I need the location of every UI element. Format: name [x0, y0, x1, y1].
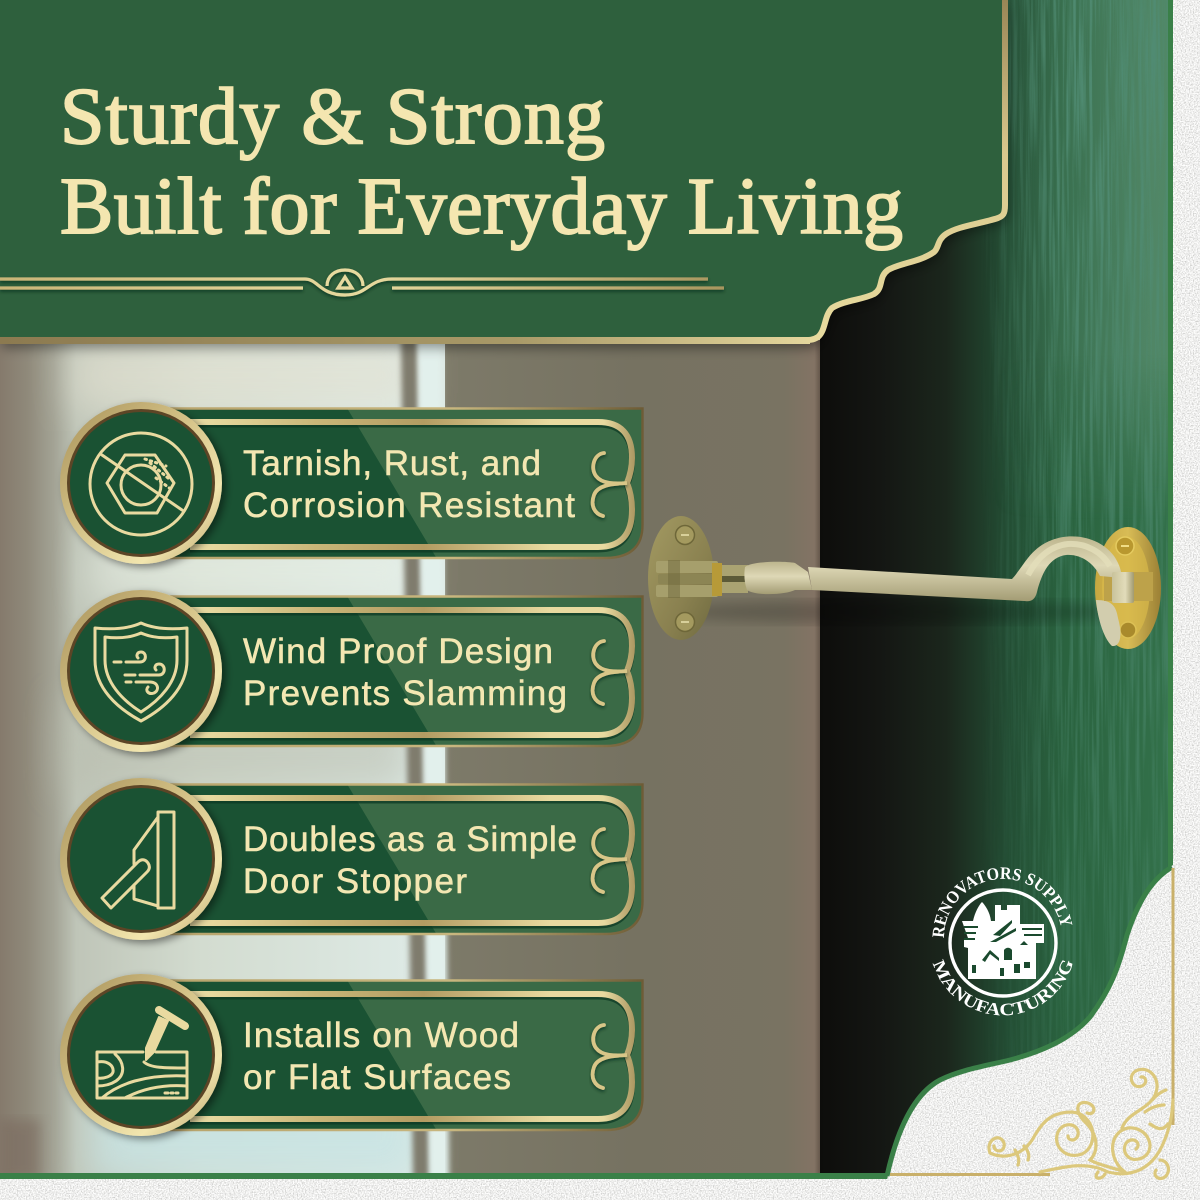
left plate — [648, 516, 714, 640]
title heading: Built for Everyday Living — [60, 163, 903, 251]
bottom green edge — [0, 1173, 890, 1179]
text: door stopper: Doubles as a Simple — [243, 820, 577, 859]
title heading: Sturdy & Strong — [60, 73, 605, 161]
logo: Renovators Supply Manufacturing: MANUFACTURING — [932, 958, 1072, 1016]
corner cutout with curved green edge — [885, 865, 1173, 1179]
logo: Renovators Supply Manufacturing — [932, 867, 1072, 1016]
icon: door wedge — [102, 812, 174, 908]
brass cabin hook — [648, 516, 1161, 649]
card 4: installs on wood — [60, 974, 643, 1136]
swelled shank — [744, 562, 812, 594]
icon: nail in wood plank — [97, 1010, 187, 1098]
title heading — [60, 73, 903, 251]
text: wind proof — [243, 632, 567, 713]
text: installs on wood — [243, 1016, 519, 1097]
card 1: tarnish, rust and corrosion resistant — [60, 402, 643, 564]
icon: crossed-out rusted nut — [90, 433, 192, 535]
text: tarnish, rust, corrosion: Tarnish, Rust, and — [243, 444, 541, 483]
text: tarnish, rust, corrosion: Corrosion Resistant — [243, 486, 575, 525]
background photo: blurred interior wall and window — [0, 340, 830, 1180]
text: wind proof: Wind Proof Design — [243, 632, 553, 671]
text: installs on wood: or Flat Surfaces — [243, 1058, 511, 1097]
text: installs on wood: Installs on Wood — [243, 1016, 519, 1055]
text: tarnish, rust, corrosion — [243, 444, 575, 525]
gold corner frame — [890, 868, 1173, 1174]
card 3: door stopper — [60, 778, 643, 940]
logo: Renovators Supply Manufacturing: RENOVATORS SUPPLY — [932, 867, 1072, 938]
icon: shield with wind — [95, 623, 187, 721]
card 2: wind proof design — [60, 590, 643, 752]
hook arm — [808, 536, 1122, 601]
green door with wood grain — [820, 0, 1173, 1176]
text: door stopper — [243, 820, 577, 901]
hook shadow — [675, 600, 1135, 624]
text: door stopper: Door Stopper — [243, 862, 467, 901]
text: wind proof: Prevents Slamming — [243, 674, 567, 713]
hinge knuckles — [656, 560, 748, 598]
top title panel — [0, 0, 1006, 344]
right plate — [1095, 527, 1161, 649]
gold corner filigree — [989, 1069, 1173, 1178]
ornamental divider — [0, 270, 724, 295]
hook staple — [1112, 572, 1134, 603]
